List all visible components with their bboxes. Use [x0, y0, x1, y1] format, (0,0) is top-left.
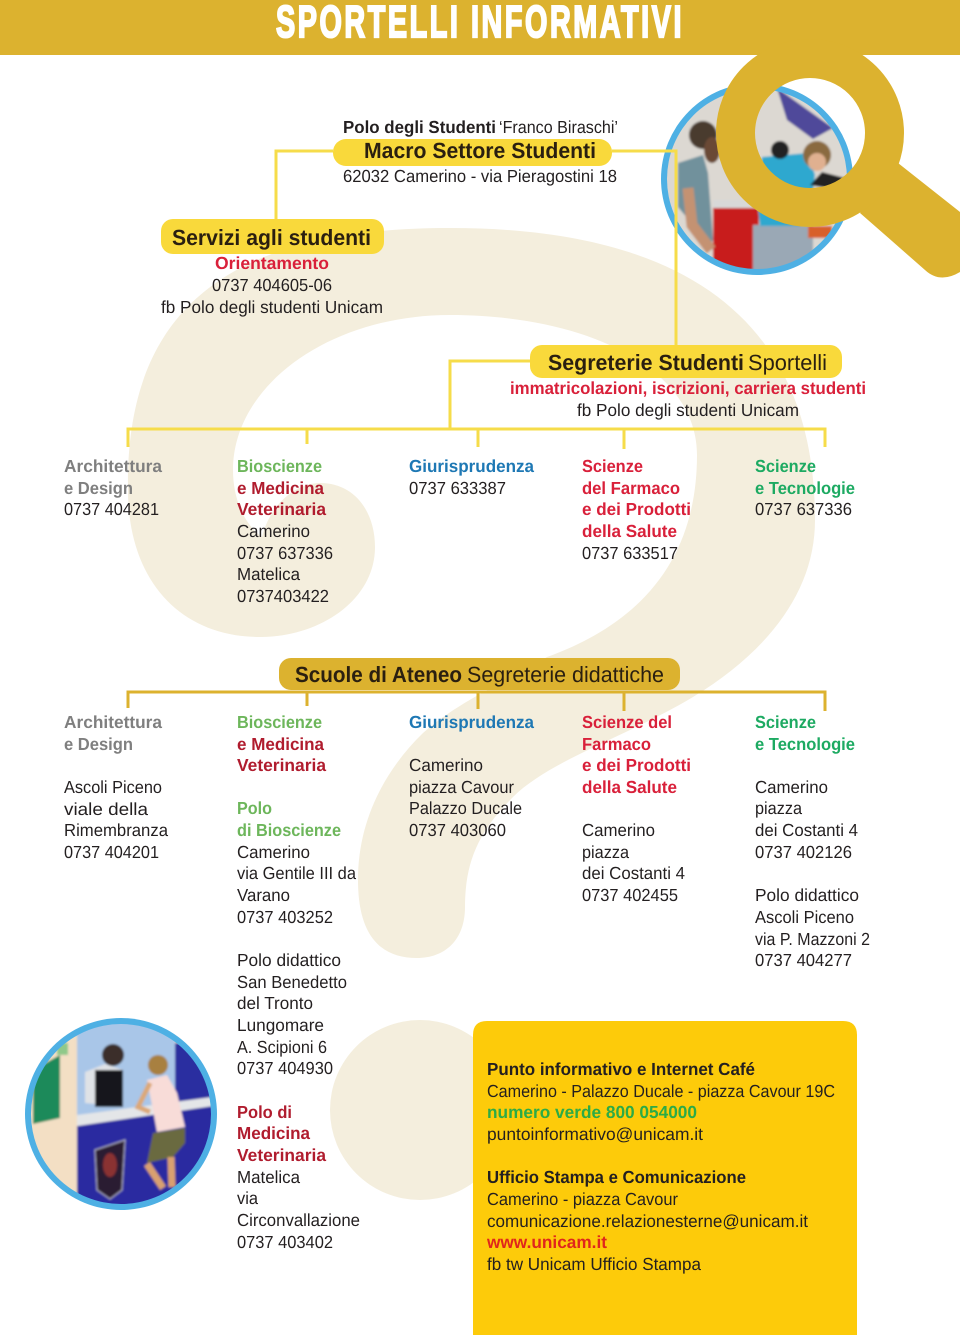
sportello: Bioscienze e Medicina Veterinaria: 0737 637336: [237, 543, 333, 563]
sportello: Architettura e Design: 0737 404281: [64, 499, 159, 519]
sportello: Scienze del Farmaco: 0737 633517: [582, 543, 678, 563]
sportello: Scienze del Farmaco: Scienze: [582, 456, 643, 476]
segreteria: Giurisprudenza: Giurisprudenza: [409, 712, 534, 732]
sportello: Scienze e Tecnologie: e Tecnologie: [755, 478, 855, 498]
segreteria: Scienze del Farmaco: [582, 712, 691, 905]
header band: [0, 0, 960, 55]
block: Servizi agli studenti: fb Polo degli studenti Unicam: [161, 297, 383, 317]
segreteria: Bioscienze e Medicina Veterinaria: Polo: [237, 798, 272, 818]
segreteria: Scienze e Tecnologie: 0737 402126: [755, 842, 852, 862]
segreteria: Scienze e Tecnologie: Scienze: [755, 712, 816, 732]
connector lines: Scuole di Ateneo: [128, 692, 825, 711]
segreteria: Bioscienze e Medicina Veterinaria: Veterinaria: [237, 1145, 326, 1165]
segreteria: Scienze e Tecnologie: dei Costanti 4: [755, 820, 858, 840]
sportello: Architettura e Design: [64, 456, 162, 519]
text: Punto informativo: puntoinformativo@unicam.it: [487, 1124, 703, 1144]
segreteria: Giurisprudenza: piazza Cavour: [409, 777, 514, 797]
segreteria: Scienze e Tecnologie: e Tecnologie: [755, 734, 855, 754]
segreteria: Architettura e Design: Ascoli Piceno: [64, 777, 162, 797]
segreteria: Scienze e Tecnologie: Polo didattico: [755, 885, 859, 905]
text: Ufficio Stampa: comunicazione.relazionesterne@unicam.it: [487, 1211, 808, 1231]
block: Segreterie Studenti: fb Polo degli studenti Unicam: [577, 400, 799, 420]
sportello: Architettura e Design: e Design: [64, 478, 133, 498]
sportello: Scienze del Farmaco: e dei Prodotti: [582, 499, 691, 519]
text: Ufficio Stampa: www.unicam.it: [486, 1232, 607, 1252]
text: Ufficio Stampa: Camerino - piazza Cavour: [487, 1189, 678, 1209]
sportello: Scienze del Farmaco: della Salute: [582, 521, 677, 541]
block: Servizi agli studenti: 0737 404605-06: [212, 275, 332, 295]
sportello: Scienze e Tecnologie: Scienze: [755, 456, 816, 476]
segreteria: Bioscienze e Medicina Veterinaria: [237, 712, 360, 1252]
panel: info box: [473, 1021, 857, 1335]
sportello: Bioscienze e Medicina Veterinaria: [237, 456, 333, 606]
segreteria: Bioscienze e Medicina Veterinaria: 0737 403252: [237, 907, 333, 927]
text: Punto informativo: Punto informativo e Internet Café: [487, 1059, 755, 1079]
sportello: Bioscienze e Medicina Veterinaria: e Medicina: [237, 478, 324, 498]
segreteria: Bioscienze e Medicina Veterinaria: San Benedetto: [237, 972, 347, 992]
segreteria: Bioscienze e Medicina Veterinaria: Polo di: [237, 1102, 292, 1122]
sportello: Bioscienze e Medicina Veterinaria: Camerino: [237, 521, 310, 541]
background question mark: [128, 228, 815, 1200]
sportello: Giurisprudenza: 0737 633387: [409, 478, 506, 498]
text: Ufficio Stampa: Ufficio Stampa e Comunicazione: [487, 1167, 746, 1187]
segreteria: Scienze del Farmaco: Farmaco: [582, 734, 651, 754]
segreteria: Scienze del Farmaco: Camerino: [582, 820, 655, 840]
segreteria: Architettura e Design: viale della: [64, 799, 148, 819]
segreteria: Bioscienze e Medicina Veterinaria: Circonvallazione: [237, 1210, 360, 1230]
segreteria: Bioscienze e Medicina Veterinaria: Polo didattico: [237, 950, 341, 970]
photo: students at the desk: [660, 80, 860, 280]
segreteria: Bioscienze e Medicina Veterinaria: via Gentile III da: [237, 863, 356, 883]
segreteria: Giurisprudenza: 0737 403060: [409, 820, 506, 840]
segreteria: Bioscienze e Medicina Veterinaria: Camerino: [237, 842, 310, 862]
sportello: Bioscienze e Medicina Veterinaria: Veterinaria: [237, 499, 326, 519]
sportello: Giurisprudenza: [409, 456, 534, 498]
block: Segreterie Studenti: [510, 345, 866, 420]
segreteria: Bioscienze e Medicina Veterinaria: Varano: [237, 885, 290, 905]
segreteria: Bioscienze e Medicina Veterinaria: Medicina: [237, 1123, 310, 1143]
sportello: Giurisprudenza: Giurisprudenza: [409, 456, 534, 476]
segreteria: Bioscienze e Medicina Veterinaria: 0737 403402: [237, 1232, 333, 1252]
block: Segreterie Studenti: Segreterie Studenti: [548, 350, 744, 375]
segreteria: Scienze del Farmaco: 0737 402455: [582, 885, 678, 905]
segreteria: Bioscienze e Medicina Veterinaria: Bioscienze: [237, 712, 322, 732]
text: Punto informativo: Camerino - Palazzo Ducale - piazza Cavour 19C: [487, 1081, 835, 1101]
block: Segreterie Studenti: Sportelli: [748, 350, 827, 375]
sportello: Bioscienze e Medicina Veterinaria: Bioscienze: [237, 456, 322, 476]
segreteria: Giurisprudenza: Palazzo Ducale: [409, 798, 522, 818]
segreteria: Architettura e Design: Rimembranza: [64, 820, 168, 840]
icon: magnifying glass: [736, 58, 960, 278]
sportello: Scienze e Tecnologie: 0737 637336: [755, 499, 852, 519]
segreteria: Giurisprudenza: [409, 712, 534, 840]
block: Macro Settore Studenti: 62032 Camerino - via Pieragostini 18: [343, 166, 617, 186]
segreteria: Scienze del Farmaco: piazza: [582, 842, 629, 862]
segreteria: Scienze del Farmaco: della Salute: [582, 777, 677, 797]
segreteria: Scienze e Tecnologie: via P. Mazzoni 2: [755, 929, 870, 949]
sportello: Bioscienze e Medicina Veterinaria: 0737403422: [237, 586, 329, 606]
sportello: Scienze e Tecnologie: [755, 456, 855, 519]
block: Servizi agli studenti: Servizi agli studenti: [172, 225, 371, 250]
segreteria: Bioscienze e Medicina Veterinaria: A. Scipioni 6: [237, 1037, 327, 1057]
segreteria: Bioscienze e Medicina Veterinaria: Lungomare: [237, 1015, 324, 1035]
segreteria: Scienze e Tecnologie: Camerino: [755, 777, 828, 797]
pill: Scuole di Ateneo: [279, 658, 680, 690]
text: Punto informativo: [487, 1059, 835, 1144]
block: Servizi agli studenti: [161, 219, 384, 317]
segreteria: Bioscienze e Medicina Veterinaria: Matelica: [237, 1167, 300, 1187]
segreteria: Scienze del Farmaco: Scienze del: [582, 712, 672, 732]
connector lines: top tree: [128, 151, 825, 449]
block: Servizi agli studenti: Orientamento: [215, 253, 329, 273]
text: Ufficio Stampa: fb tw Unicam Ufficio Stampa: [487, 1254, 701, 1274]
segreteria: Scienze del Farmaco: e dei Prodotti: [582, 755, 691, 775]
sportello: Bioscienze e Medicina Veterinaria: Matelica: [237, 564, 300, 584]
sportello: Architettura e Design: Architettura: [64, 456, 162, 476]
segreteria: Bioscienze e Medicina Veterinaria: e Medicina: [237, 734, 324, 754]
block: Macro Settore Studenti: ‘Franco Biraschi’: [499, 117, 618, 137]
segreteria: Scienze e Tecnologie: piazza: [755, 798, 802, 818]
pill: Scuole di Ateneo: Scuole di Ateneo: [295, 662, 462, 687]
pill: Scuole di Ateneo: Segreterie didattiche: [467, 662, 664, 687]
segreteria: Architettura e Design: 0737 404201: [64, 842, 159, 862]
segreteria: Scienze e Tecnologie: [755, 712, 870, 970]
segreteria: Architettura e Design: Architettura: [64, 712, 162, 732]
sportello: Scienze del Farmaco: del Farmaco: [582, 478, 680, 498]
sportello: Scienze del Farmaco: [582, 456, 691, 563]
segreteria: Architettura e Design: e Design: [64, 734, 133, 754]
segreteria: Bioscienze e Medicina Veterinaria: 0737 404930: [237, 1058, 333, 1078]
segreteria: Architettura e Design: [64, 712, 168, 862]
segreteria: Giurisprudenza: Camerino: [409, 755, 483, 775]
text: Ufficio Stampa: [486, 1167, 808, 1274]
block: Macro Settore Studenti: Polo degli Studenti: [343, 117, 496, 137]
text: Punto informativo: numero verde 800 054000: [487, 1102, 697, 1122]
segreteria: Bioscienze e Medicina Veterinaria: Veterinaria: [237, 755, 326, 775]
block: Segreterie Studenti: immatricolazioni, iscrizioni, carriera studenti: [510, 378, 866, 398]
block: Macro Settore Studenti: Macro Settore Studenti: [364, 138, 596, 163]
segreteria: Scienze e Tecnologie: Ascoli Piceno: [755, 907, 854, 927]
pill: Macro Settore Studenti: [333, 139, 612, 166]
photo: front desk with student: [25, 1015, 225, 1215]
segreteria: Bioscienze e Medicina Veterinaria: via: [237, 1188, 258, 1208]
segreteria: Scienze e Tecnologie: 0737 404277: [755, 950, 852, 970]
block: Macro Settore Studenti: [333, 117, 618, 186]
segreteria: Scienze del Farmaco: dei Costanti 4: [582, 863, 685, 883]
segreteria: Bioscienze e Medicina Veterinaria: del Tronto: [237, 993, 313, 1013]
segreteria: Bioscienze e Medicina Veterinaria: di Bioscienze: [237, 820, 341, 840]
